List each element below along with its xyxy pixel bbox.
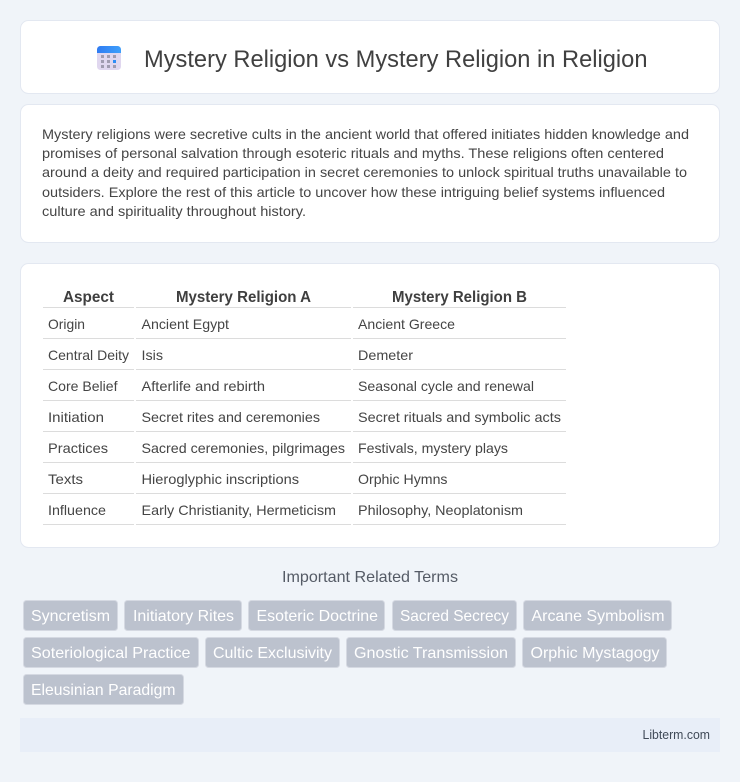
table row: influence: Influence xyxy=(48,502,106,518)
tag list: related terms: Initiatory Rites xyxy=(133,608,234,625)
text block: introduction: outsiders. Explore the rest of this article to uncover how these intriguing belief systems influenced xyxy=(42,184,665,200)
text block: introduction: around a deity and required participation in secret ceremonies to unlock spiritual truths unavailable to xyxy=(42,164,687,180)
tag list: related terms: Orphic Mystagogy xyxy=(530,645,660,662)
icon: calendar xyxy=(97,46,121,70)
table row: practices: Festivals, mystery plays xyxy=(358,440,508,456)
footer xyxy=(20,718,720,752)
table header: Mystery Religion A xyxy=(176,289,311,306)
table row: texts xyxy=(48,471,448,487)
heading: related terms: Important Related Terms xyxy=(282,569,458,586)
table row: central deity xyxy=(48,347,413,363)
title: Mystery Religion vs Mystery Religion in Religion xyxy=(144,46,648,73)
table row: initiation xyxy=(48,409,561,425)
table row: initiation: Initiation xyxy=(48,409,104,425)
table row: practices: Sacred ceremonies, pilgrimages xyxy=(142,440,345,456)
table row: central deity: Isis xyxy=(142,347,163,363)
table row: practices: Practices xyxy=(48,440,108,456)
table row: origin: Origin xyxy=(48,316,85,332)
text block: introduction xyxy=(42,126,689,219)
table row: origin: Ancient Greece xyxy=(358,316,455,332)
footer: Libterm.com xyxy=(642,728,710,742)
table row: influence xyxy=(48,502,523,518)
table row: core belief: Afterlife and rebirth xyxy=(142,378,265,394)
panel: comparison table xyxy=(20,264,720,548)
table header: Mystery Religion B xyxy=(392,289,527,306)
tag list: related terms: Gnostic Transmission xyxy=(354,645,508,662)
table row: central deity: Demeter xyxy=(358,347,413,363)
tag list: related terms: Cultic Exclusivity xyxy=(213,645,332,662)
tag list: related terms: Sacred Secrecy xyxy=(400,608,509,625)
table row: initiation: Secret rituals and symbolic acts xyxy=(358,409,561,425)
tag list: related terms: Eleusinian Paradigm xyxy=(31,682,176,699)
tag list: related terms: Syncretism xyxy=(31,608,110,625)
table row: origin xyxy=(48,316,455,332)
table row: core belief: Seasonal cycle and renewal xyxy=(358,378,534,394)
text block: introduction: Mystery religions were secretive cults in the ancient world that offered initiates hidden knowledge and xyxy=(42,126,689,142)
table row: origin: Ancient Egypt xyxy=(142,316,229,332)
table row: influence: Philosophy, Neoplatonism xyxy=(358,502,523,518)
table header xyxy=(63,289,527,306)
text block: introduction: culture and spirituality throughout history. xyxy=(42,203,306,219)
tag list: related terms xyxy=(24,600,672,704)
tag list: related terms: Arcane Symbolism xyxy=(532,608,664,625)
table row: core belief: Core Belief xyxy=(48,378,118,394)
tag list: related terms: Soteriological Practice xyxy=(31,645,191,662)
table header: Aspect xyxy=(63,289,115,306)
panel: title card xyxy=(20,20,720,94)
table row: texts: Orphic Hymns xyxy=(358,471,448,487)
tag list: related terms: Esoteric Doctrine xyxy=(256,608,378,625)
table row: texts: Texts xyxy=(48,471,83,487)
table row: initiation: Secret rites and ceremonies xyxy=(142,409,320,425)
table row: core belief xyxy=(48,378,534,394)
panel: introduction xyxy=(20,104,720,242)
table row: texts: Hieroglyphic inscriptions xyxy=(142,471,299,487)
text block: introduction: promises of personal salvation through esoteric rituals and myths. These religions often centered xyxy=(42,145,664,161)
table row: practices xyxy=(48,440,508,456)
table row: central deity: Central Deity xyxy=(48,347,129,363)
table row: influence: Early Christianity, Hermeticism xyxy=(142,502,336,518)
